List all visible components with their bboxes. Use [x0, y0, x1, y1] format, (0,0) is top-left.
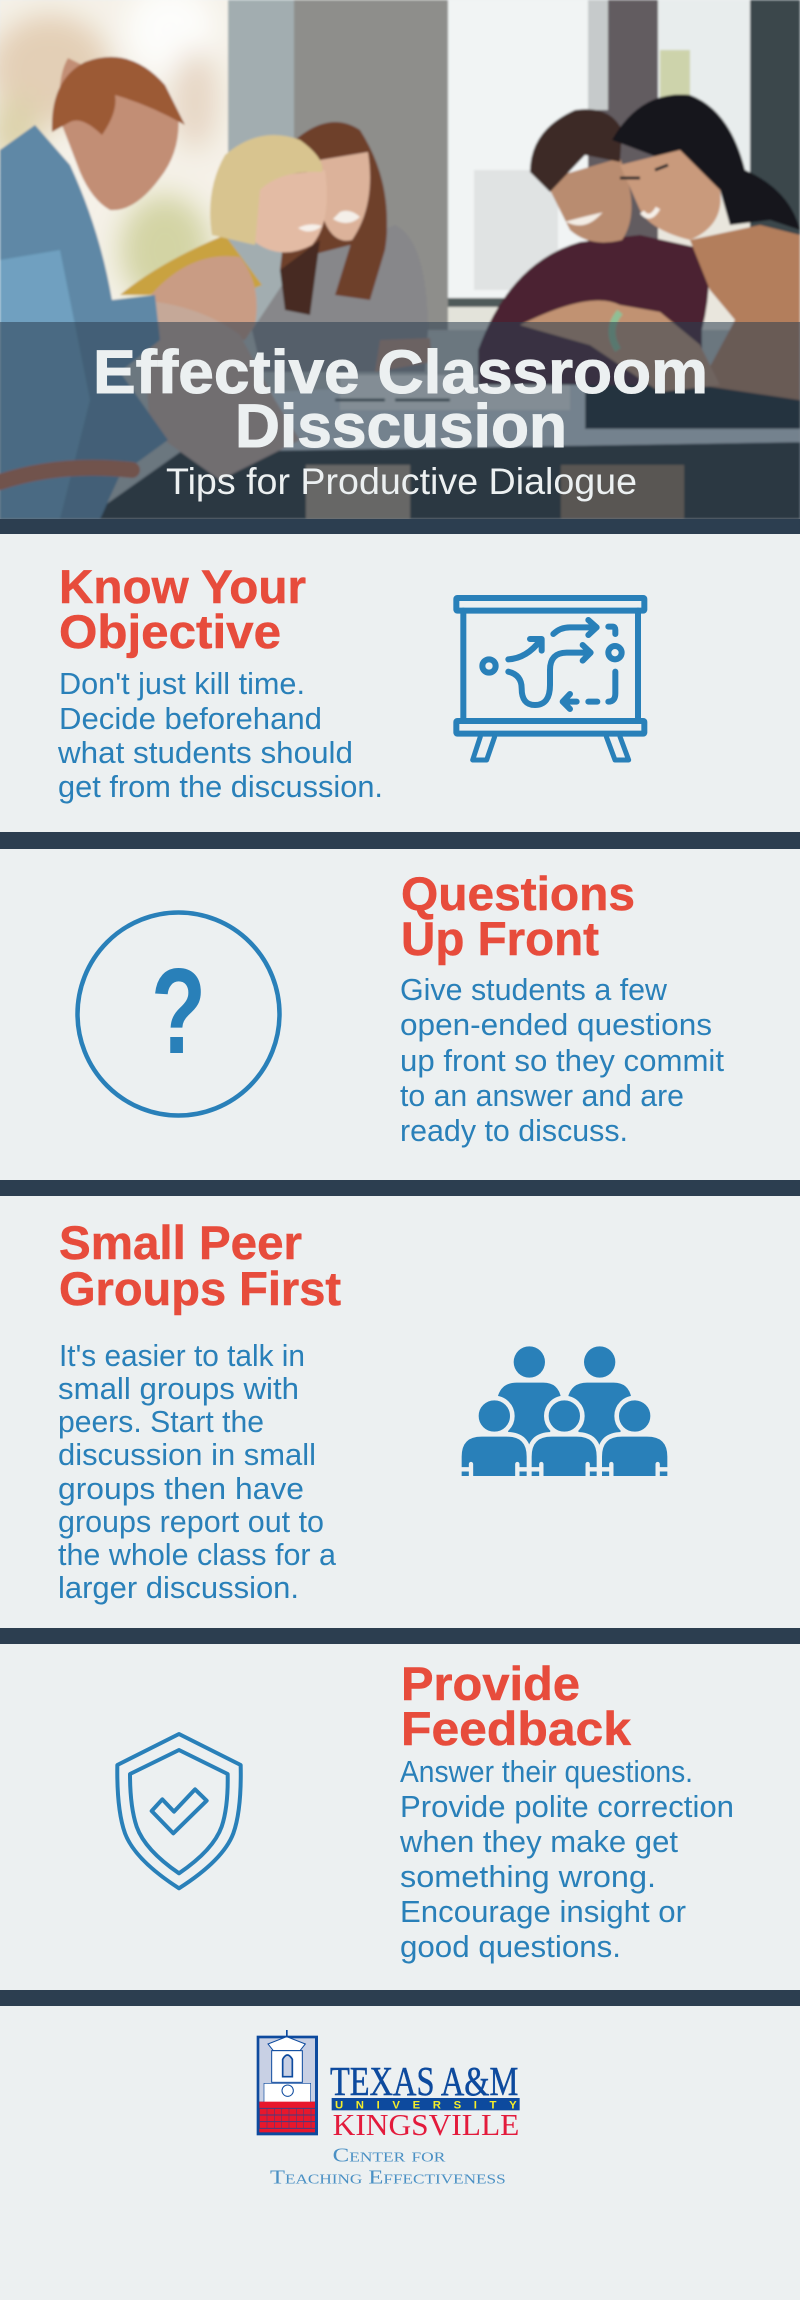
- title: Disscusion: [235, 392, 567, 460]
- body text: Give students a few: [400, 972, 668, 1007]
- heading: [59, 560, 306, 658]
- body text: Answer their questions.: [400, 1754, 693, 1789]
- blonde woman: [120, 235, 262, 295]
- center name: [270, 2145, 506, 2188]
- man on the left: [60, 58, 179, 210]
- body text: the whole class for a: [58, 1537, 337, 1572]
- woman on the right: [690, 225, 800, 400]
- body text: to an answer and are: [400, 1078, 684, 1113]
- body text: what students should: [57, 735, 353, 770]
- body text: good questions.: [400, 1929, 621, 1964]
- body text: It's easier to talk in: [59, 1338, 305, 1373]
- title: Effective Classroom: [93, 338, 708, 406]
- body text: groups then have: [58, 1471, 304, 1506]
- panel: provide feedback: [117, 1657, 734, 1964]
- wordmark: TEXAS A&M: [330, 2058, 518, 2104]
- heading: Feedback: [401, 1702, 632, 1755]
- icon: question mark in circle: [78, 912, 280, 1116]
- table and lower shadows: [272, 384, 800, 451]
- brunette woman: [279, 121, 388, 271]
- center name: Teaching Effectiveness: [270, 2166, 506, 2188]
- heading: [59, 1216, 341, 1315]
- body text: peers. Start the: [58, 1404, 264, 1439]
- heading: Up Front: [401, 912, 599, 965]
- crest: clock tower: [257, 2030, 318, 2135]
- body text: Encourage insight or: [400, 1894, 686, 1929]
- man on the right: [478, 235, 709, 385]
- panel: questions up front: [78, 867, 724, 1148]
- body text: something wrong.: [400, 1859, 656, 1894]
- heading: Know Your: [59, 560, 306, 613]
- title overlay band: [0, 322, 800, 519]
- panel: small peer groups first: [58, 1216, 673, 1605]
- icon: strategy board: [456, 598, 644, 760]
- classroom photo: [0, 0, 800, 520]
- heading: Provide: [401, 1657, 580, 1710]
- body text: Don't just kill time.: [59, 666, 305, 701]
- body text: [399, 1754, 734, 1964]
- center name: Center for: [333, 2145, 446, 2167]
- title: [93, 338, 708, 460]
- body text: get from the discussion.: [58, 769, 383, 804]
- body text: [58, 1338, 337, 1605]
- body text: Decide beforehand: [59, 701, 322, 736]
- heading: [401, 867, 635, 965]
- wordmark: UNIVERSITY: [335, 2100, 517, 2112]
- wordmark: [330, 2058, 520, 2142]
- body text: Provide polite correction: [400, 1789, 734, 1824]
- heading: [401, 1657, 632, 1755]
- body text: ready to discuss.: [400, 1113, 628, 1148]
- body text: groups report out to: [58, 1504, 324, 1539]
- icon: question mark in circle: ?: [151, 943, 206, 1079]
- body text: when they make get: [399, 1824, 678, 1859]
- subtitle: Tips for Productive Dialogue: [166, 461, 637, 502]
- heading: Groups First: [59, 1262, 341, 1315]
- logo: Texas A&M University Kingsville, Center for Teaching Effectiveness: [257, 2030, 520, 2188]
- heading: Objective: [59, 605, 281, 658]
- body text: larger discussion.: [58, 1570, 299, 1605]
- body text: [57, 666, 383, 804]
- chair arm: [0, 468, 132, 482]
- body text: [400, 972, 724, 1148]
- body text: open-ended questions: [400, 1007, 712, 1042]
- panel: know your objective: [57, 560, 644, 804]
- body text: small groups with: [58, 1371, 299, 1406]
- panel: header photo with title: [0, 0, 800, 520]
- wordmark: KINGSVILLE: [333, 2108, 519, 2142]
- heading: Questions: [401, 867, 635, 920]
- heading: Small Peer: [59, 1216, 302, 1269]
- icon: seated group of people: [457, 1346, 673, 1483]
- icon: shield with check mark: [117, 1734, 241, 1888]
- body text: discussion in small: [58, 1437, 316, 1472]
- body text: up front so they commit: [400, 1043, 724, 1078]
